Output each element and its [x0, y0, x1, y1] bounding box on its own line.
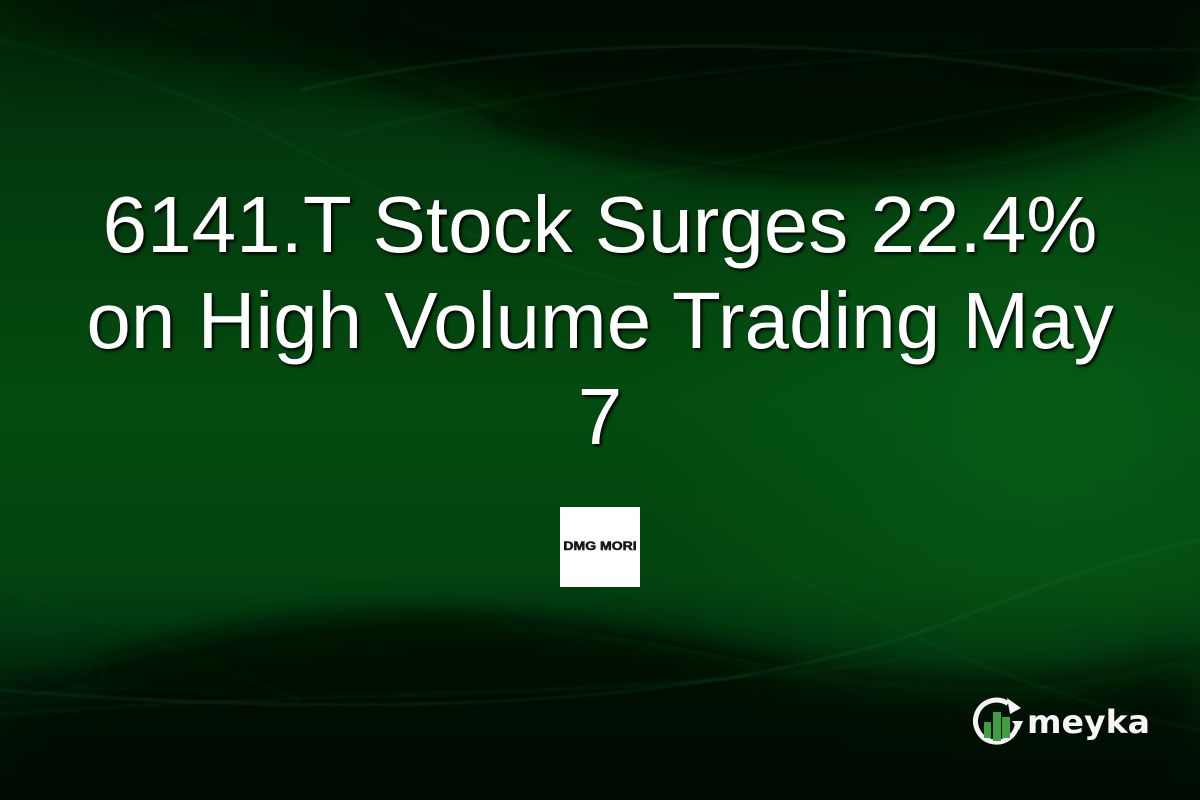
dark lower swooshes — [0, 627, 1200, 800]
wordmark: meyka — [1027, 703, 1150, 741]
dark upper swooshes — [0, 0, 1200, 174]
company logo: DMG MORI: DMG MORI — [563, 541, 637, 553]
brand: meyka logo — [972, 698, 1150, 745]
company logo: DMG MORI — [560, 507, 640, 587]
icon: circular arrow with bars — [976, 698, 1023, 742]
title: 6141.T Stock Surges 22.4% on High Volume Trading May 7 — [86, 180, 1114, 461]
